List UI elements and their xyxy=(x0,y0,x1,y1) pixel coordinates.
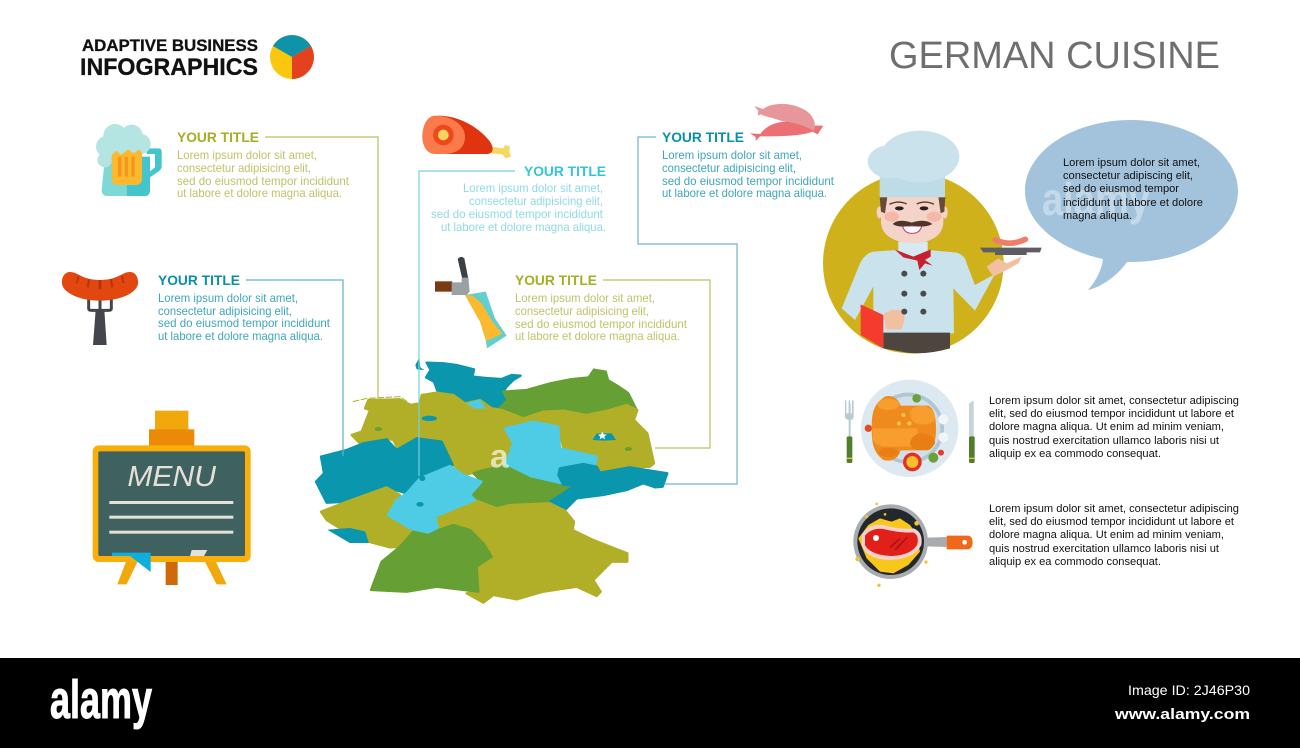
text block: steak description: dolore magna aliqua. Ut enim ad minim veniam, xyxy=(989,529,1224,541)
logo heading xyxy=(80,36,258,81)
panel: sausage title block: consectetur adipisicing elit, xyxy=(158,304,292,318)
icon: beer mug xyxy=(96,124,162,196)
panel: sausage title block: Lorem ipsum dolor sit amet, xyxy=(158,291,298,305)
icon: logo pie xyxy=(270,35,314,79)
panel: beer tap title block xyxy=(515,272,688,343)
text block: steak description: aliquip ex ea commodo consequat. xyxy=(989,556,1161,568)
chef body parts xyxy=(842,131,1022,353)
panel: beer mug title block: YOUR TITLE xyxy=(177,129,259,145)
speech bubble: Lorem ipsum dolor sit amet, xyxy=(1063,157,1200,169)
panel: beer tap title block: sed do eiusmod tempor incididunt xyxy=(515,317,688,331)
map of Germany xyxy=(316,357,667,603)
panel: beer tap title block: ut labore et dolore magna aliqua. xyxy=(515,329,680,343)
panel: sausages title block: YOUR TITLE xyxy=(662,129,744,145)
icon: steak in pan xyxy=(853,503,973,587)
text block: steak description: quis nostrud exercitation ullamco laboris nisi ut xyxy=(989,543,1219,555)
panel: beer tap title block: Lorem ipsum dolor sit amet, xyxy=(515,291,655,305)
panel: beer tap title block: YOUR TITLE xyxy=(515,272,597,288)
speech bubble: magna aliqua. xyxy=(1063,210,1132,222)
footer band: www.alamy.com xyxy=(1114,706,1250,723)
panel: sausages title block xyxy=(662,129,835,200)
panel: sausage title block: sed do eiusmod tempor incididunt xyxy=(158,316,331,330)
speech bubble: incididunt ut labore et dolore xyxy=(1063,197,1203,209)
map of Germany: a xyxy=(490,438,509,475)
logo heading: INFOGRAPHICS xyxy=(80,54,258,81)
text block: chicken description: aliquip ex ea commodo consequat. xyxy=(989,448,1161,460)
footer band: alamy xyxy=(50,670,152,730)
panel: ham title block: sed do eiusmod tempor incididunt xyxy=(431,207,604,221)
footer band xyxy=(0,658,1300,748)
panel: sausages title block: sed do eiusmod tempor incididunt xyxy=(662,174,835,188)
icon: roast chicken plate xyxy=(845,380,975,477)
panel: sausage title block: ut labore et dolore magna aliqua. xyxy=(158,329,323,343)
speech bubble xyxy=(1025,120,1238,290)
panel: beer mug title block: sed do eiusmod tempor incididunt xyxy=(177,174,350,188)
panel: ham title block: ut labore et dolore magna aliqua. xyxy=(441,220,606,234)
panel: sausage title block: YOUR TITLE xyxy=(158,272,240,288)
panel: sausage title block xyxy=(158,272,331,343)
title: GERMAN CUISINE xyxy=(889,35,1220,77)
plate with sausage xyxy=(980,239,1042,255)
panel: ham title block: Lorem ipsum dolor sit amet, xyxy=(463,181,603,195)
panel: ham title block: YOUR TITLE xyxy=(524,163,606,179)
text block: steak description: elit, sed do eiusmod tempor incididunt ut labore et xyxy=(989,516,1234,528)
illustration: menu board: MENU xyxy=(127,461,217,493)
footer band: Image ID: 2J46P30 xyxy=(1128,682,1250,698)
text block: chicken description: elit, sed do eiusmod tempor incididunt ut labore et xyxy=(989,408,1234,420)
panel: sausages title block: consectetur adipisicing elit, xyxy=(662,161,796,175)
text block: chicken description xyxy=(989,395,1239,460)
illustration: chef xyxy=(823,131,1042,354)
icon: sausage on fork xyxy=(62,272,138,345)
text block: steak description xyxy=(989,503,1239,568)
text block: chicken description: dolore magna aliqua. Ut enim ad minim veniam, xyxy=(989,421,1224,433)
panel: ham title block: consectetur adipisicing elit, xyxy=(469,194,603,208)
speech bubble: consectetur adipiscing elit, xyxy=(1063,170,1193,182)
icon: pink sausages xyxy=(750,104,823,141)
illustration: menu board xyxy=(93,411,251,585)
connector lines xyxy=(246,137,737,484)
panel: beer mug title block xyxy=(177,129,350,200)
panel: beer mug title block: Lorem ipsum dolor sit amet, xyxy=(177,148,317,162)
text block: steak description: Lorem ipsum dolor sit amet, consectetur adipiscing xyxy=(989,503,1239,515)
panel: beer mug title block: consectetur adipisicing elit, xyxy=(177,161,311,175)
logo heading: ADAPTIVE BUSINESS xyxy=(82,36,258,55)
panel: sausages title block: Lorem ipsum dolor sit amet, xyxy=(662,148,802,162)
speech bubble: alamy xyxy=(1042,173,1150,225)
panel: ham title block xyxy=(431,163,606,234)
text block: chicken description: Lorem ipsum dolor sit amet, consectetur adipiscing xyxy=(989,395,1239,407)
panel: sausages title block: ut labore et dolore magna aliqua. xyxy=(662,186,827,200)
panel: beer mug title block: ut labore et dolore magna aliqua. xyxy=(177,186,342,200)
speech bubble: sed do eiusmod tempor xyxy=(1063,183,1179,195)
icon: beer tap and glass xyxy=(435,257,507,348)
icon: ham xyxy=(422,116,511,158)
panel: beer tap title block: consectetur adipisicing elit, xyxy=(515,304,649,318)
text block: chicken description: quis nostrud exercitation ullamco laboris nisi ut xyxy=(989,435,1219,447)
